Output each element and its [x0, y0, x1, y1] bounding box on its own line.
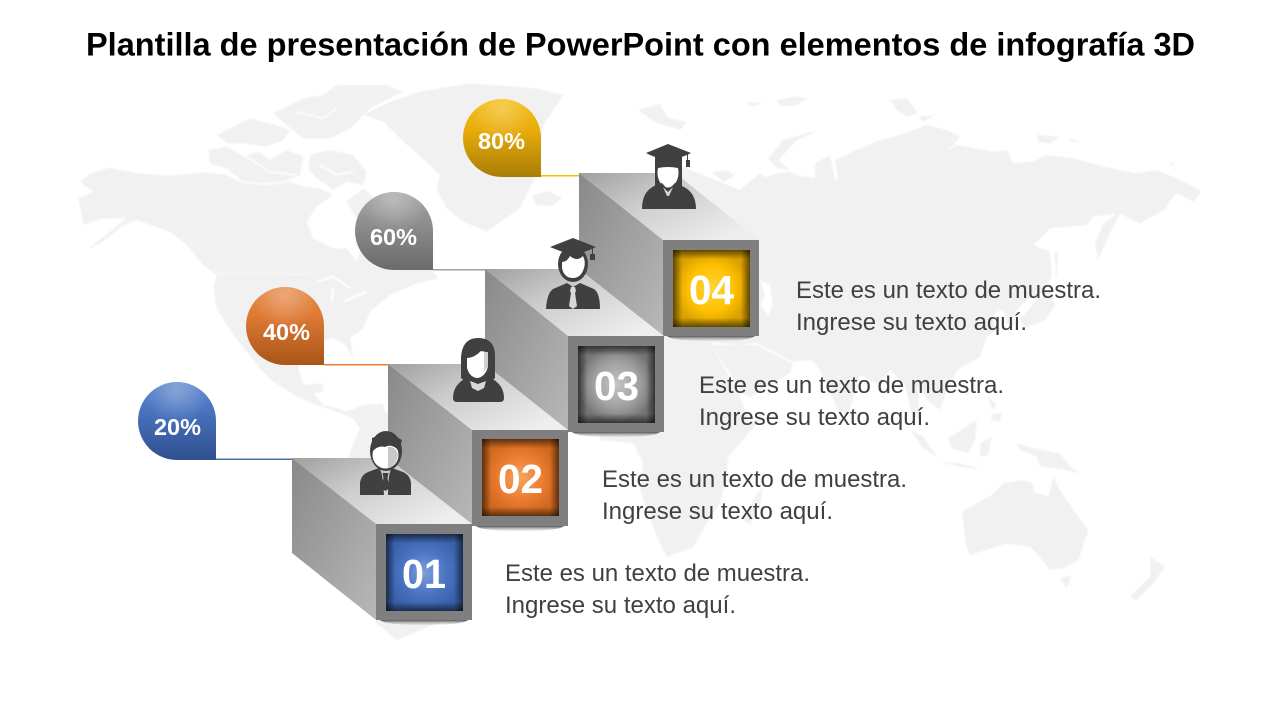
connector line 60%	[433, 269, 485, 270]
step 4 block	[579, 173, 759, 341]
step 1 block	[292, 458, 472, 625]
text block 01: Ingrese su texto aquí.	[505, 592, 736, 619]
step 2 block: 02	[498, 456, 543, 502]
icon: male graduate	[546, 238, 600, 309]
bubble 80%: 80%	[478, 128, 525, 154]
bubble 20%	[138, 382, 216, 460]
title: Plantilla de presentación de PowerPoint con elementos de infografía 3D	[86, 26, 1195, 62]
text block 03: Este es un texto de muestra.	[699, 372, 1004, 399]
icon: female graduate	[642, 144, 696, 209]
text block 04	[796, 277, 1101, 336]
text block 01	[505, 560, 810, 619]
text block 02: Ingrese su texto aquí.	[602, 498, 833, 525]
text block 02: Este es un texto de muestra.	[602, 466, 907, 493]
step 3 block	[485, 269, 664, 437]
step 4 block: 04	[689, 267, 734, 313]
text block 01: Este es un texto de muestra.	[505, 560, 810, 587]
step 3 block: 03	[594, 363, 639, 409]
connector line 40%	[324, 364, 388, 366]
bubble 20%: 20%	[154, 414, 201, 440]
icon: woman	[453, 338, 504, 402]
text block 02	[602, 466, 907, 525]
text block 03	[699, 372, 1004, 431]
bubble 60%	[355, 192, 433, 270]
text block 03: Ingrese su texto aquí.	[699, 404, 930, 431]
bubble 40%	[246, 287, 324, 365]
text block 04: Este es un texto de muestra.	[796, 277, 1101, 304]
bubble 60%: 60%	[370, 224, 417, 250]
icon: man with headset	[360, 431, 411, 495]
bubble 40%: 40%	[263, 319, 310, 345]
text block 04: Ingrese su texto aquí.	[796, 309, 1027, 336]
connector line 20%	[216, 458, 292, 460]
world map background	[78, 83, 1202, 640]
bubble 80%	[463, 99, 541, 177]
connector line 80%	[541, 175, 579, 176]
step 1 block: 01	[402, 551, 446, 597]
step 2 block	[388, 364, 568, 531]
